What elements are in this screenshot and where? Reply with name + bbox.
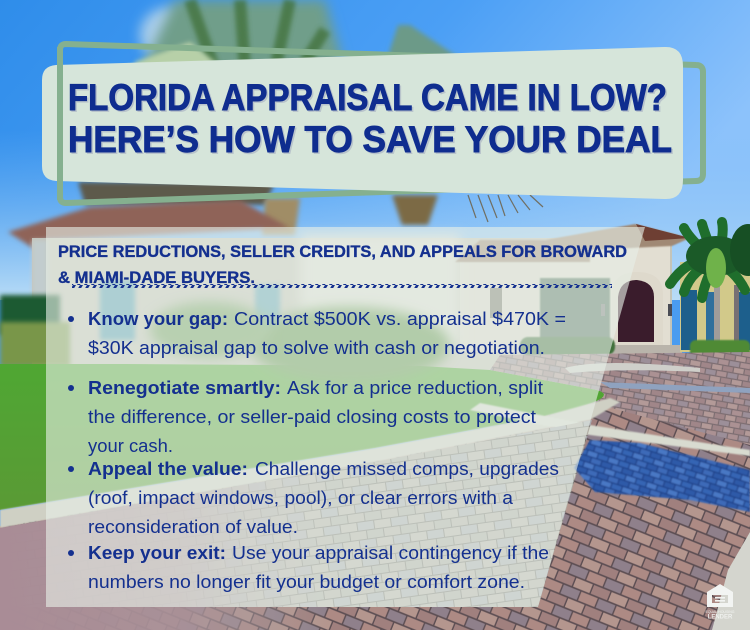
blurred roof left bbox=[8, 200, 290, 250]
subheading: PRICE REDUCTIONS, SELLER CREDITS, AND APPEALS FOR BROWARD bbox=[58, 242, 627, 261]
hedge near door bbox=[520, 337, 750, 358]
title bbox=[68, 77, 674, 162]
palm trees right bbox=[670, 222, 750, 355]
bullet: know your gap: Know your gap: bbox=[88, 308, 228, 329]
bullet: renegotiate smartly: the difference, or seller-paid closing costs to protect bbox=[88, 406, 536, 427]
paver driveway upper bbox=[490, 352, 750, 630]
title frame: left bar over panel bbox=[57, 47, 63, 200]
title: FLORIDA APPRAISAL CAME IN LOW? bbox=[70, 78, 668, 120]
title frame: green outline bbox=[60, 44, 703, 203]
light pavers under the panel bbox=[0, 420, 592, 607]
bullet: renegotiate smartly: Renegotiate smartly: bbox=[88, 377, 281, 398]
bullet: appeal the value: Appeal the value: bbox=[88, 458, 248, 479]
bullet: know your gap: Contract $500K vs. appraisal $470K = bbox=[234, 308, 566, 329]
subheading: & MIAMI-DADE BUYERS. bbox=[58, 268, 255, 287]
title: HERE’S HOW TO SAVE YOUR DEAL bbox=[68, 119, 672, 160]
translucent content panel bbox=[46, 227, 645, 607]
pink blurred pavers lower left bbox=[0, 462, 375, 630]
house body bbox=[32, 224, 690, 408]
light path lower right bbox=[712, 532, 750, 630]
bullet: renegotiate smartly: your cash. bbox=[88, 435, 173, 456]
palm fronds right of centre bbox=[468, 195, 543, 222]
bullet: know your gap: $30K appraisal gap to solve with cash or negotiation. bbox=[88, 337, 545, 358]
bullet: appeal the value: (roof, impact windows, pool), or clear errors with a bbox=[88, 487, 514, 508]
blue shadow on driveway bbox=[574, 440, 750, 512]
bullet: keep your exit bbox=[68, 542, 549, 592]
light stone strips bbox=[0, 398, 750, 528]
lender logo bbox=[705, 584, 735, 620]
bullet: renegotiate smartly: Ask for a price reduction, split bbox=[287, 377, 543, 398]
subheading bbox=[58, 242, 627, 287]
paver driveway lower bbox=[0, 405, 750, 630]
bullet: appeal the value bbox=[68, 458, 559, 537]
bullet: appeal the value: Challenge missed comps, upgrades bbox=[255, 458, 559, 479]
bullet: keep your exit: Keep your exit: bbox=[88, 542, 226, 563]
bullet: know your gap bbox=[68, 308, 566, 358]
title: HERE’S HOW TO SAVE YOUR DEAL bbox=[70, 120, 674, 162]
bullet: appeal the value: reconsideration of value. bbox=[88, 516, 298, 537]
title panel bbox=[42, 47, 683, 199]
lender logo: LENDER bbox=[708, 614, 733, 620]
bullet: keep your exit: numbers no longer fit your budget or comfort zone. bbox=[88, 571, 525, 592]
right windows bbox=[680, 262, 750, 352]
hedge and lawn, left bbox=[0, 295, 604, 510]
lender logo: EQUAL HOUSING bbox=[705, 610, 735, 614]
blurred palm tree behind the title bbox=[78, 0, 470, 235]
bullet: keep your exit: Use your appraisal contingency if the bbox=[232, 542, 549, 563]
sky bbox=[0, 0, 750, 300]
title: FLORIDA APPRAISAL CAME IN LOW? bbox=[68, 77, 667, 118]
bullet: renegotiate smartly bbox=[68, 377, 543, 456]
